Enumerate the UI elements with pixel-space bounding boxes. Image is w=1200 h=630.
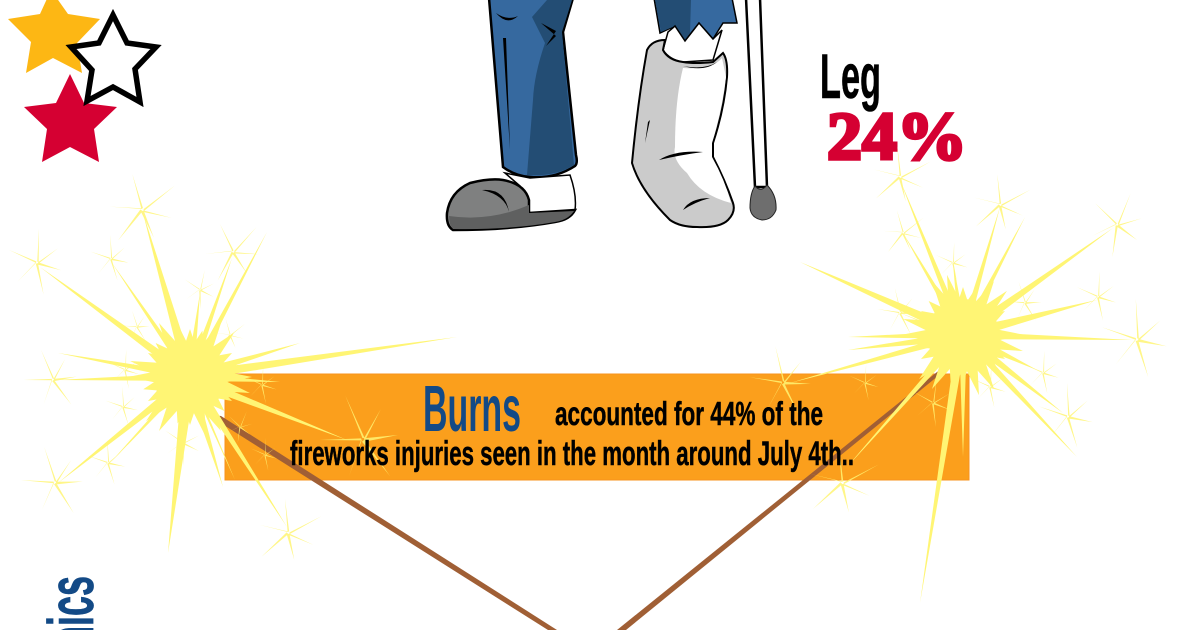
decorative stars [8, 0, 156, 162]
label: leg [820, 42, 967, 174]
left sparkler burst [2, 158, 457, 570]
illustration: legs with cast and crutch [447, 0, 776, 230]
icon: black outline star [71, 15, 156, 102]
torn trouser leg [654, 0, 737, 41]
callout line two: fireworks injuries seen in the month around July 4th.. [290, 435, 854, 473]
plaster cast [632, 23, 734, 227]
left trouser leg [489, 0, 577, 177]
icon: gold star [8, 0, 100, 73]
leg heading: Leg [820, 42, 881, 112]
burns heading: Burns [423, 372, 521, 445]
orange callout band [225, 374, 969, 480]
callout text [290, 372, 854, 473]
right sparkler stick [617, 368, 942, 630]
left shoe [447, 173, 575, 230]
crutch [746, 0, 776, 220]
callout line one: accounted for 44% of the [555, 395, 823, 432]
right sparkler burst [747, 137, 1170, 603]
icon: red star [24, 74, 117, 162]
left sparkler stick [213, 415, 557, 630]
leg percentage: 24% [827, 98, 967, 174]
